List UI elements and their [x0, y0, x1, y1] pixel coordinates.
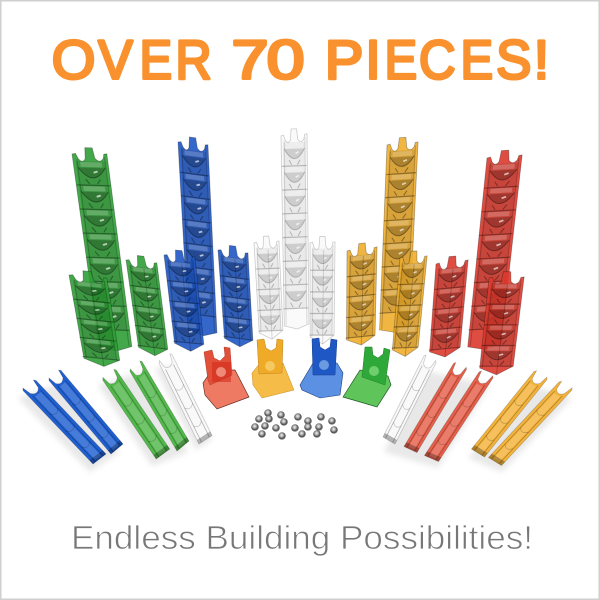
- green rail 1: [102, 368, 170, 459]
- blue towers: [163, 135, 253, 353]
- red corner base: [203, 347, 249, 409]
- short green tower, front: [68, 269, 121, 368]
- tall clear tower: [281, 128, 309, 330]
- tagline: Endless Building Possibilities!: [71, 519, 533, 556]
- blue corner base: [300, 338, 343, 398]
- short clear tower, left: [254, 236, 283, 340]
- yellow rail 2: [488, 380, 573, 466]
- short green tower, right: [125, 254, 169, 358]
- short yellow tower, right: [390, 251, 428, 357]
- title: 0: [267, 30, 305, 91]
- red towers: [427, 149, 525, 375]
- green towers: [68, 147, 169, 368]
- title: V: [98, 30, 133, 91]
- title: P: [325, 29, 363, 90]
- blue rail 1: [22, 379, 106, 464]
- short blue tower, right: [218, 244, 253, 349]
- steel marbles: [251, 409, 338, 440]
- title: [52, 28, 549, 91]
- title: C: [419, 30, 456, 91]
- yellow rail 1: [472, 370, 548, 457]
- short red tower, left: [427, 255, 469, 359]
- short yellow tower, left: [345, 242, 377, 347]
- title: !: [534, 28, 549, 90]
- title: R: [176, 29, 212, 91]
- title: O: [52, 29, 95, 90]
- tall yellow tower: [378, 137, 418, 333]
- blue rail 2: [48, 369, 123, 454]
- short red tower, front: [477, 272, 525, 375]
- title: 7: [232, 29, 269, 90]
- clear rail right: [383, 354, 437, 444]
- short blue tower, left: [163, 249, 205, 353]
- tall green tower: [71, 147, 132, 351]
- red rail 1: [404, 362, 467, 452]
- clear towers: [254, 128, 335, 344]
- yellow corner base: [252, 339, 294, 398]
- title: E: [140, 30, 172, 91]
- yellow towers: [345, 137, 428, 357]
- green corner base: [343, 347, 391, 407]
- title: E: [385, 30, 417, 91]
- tall blue tower: [178, 135, 217, 338]
- title: I: [365, 28, 381, 90]
- short clear tower, right: [309, 236, 335, 344]
- title: S: [496, 30, 531, 91]
- rail soft shadows: [18, 366, 572, 472]
- title: E: [461, 30, 493, 91]
- green rail 2: [129, 360, 189, 451]
- red rail 2: [424, 370, 494, 462]
- clear rail left: [158, 353, 212, 444]
- tall red tower: [466, 149, 523, 351]
